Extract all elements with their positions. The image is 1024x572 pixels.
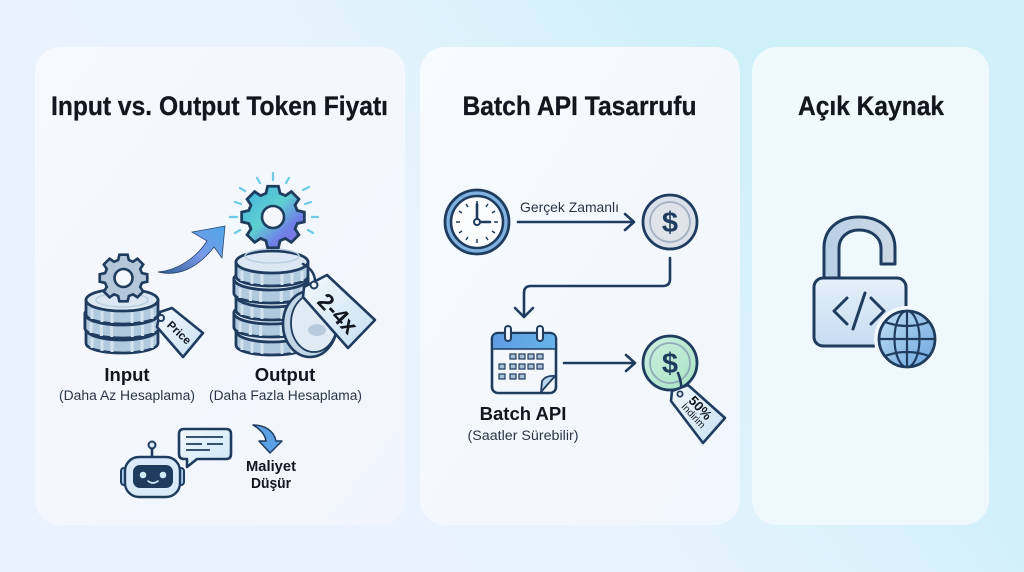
icon: 2-4x tag	[303, 264, 375, 348]
heading: open source: Açık Kaynak	[798, 91, 945, 121]
icon: output coin stack	[234, 249, 308, 355]
label: input: (Daha Az Hesaplama)	[59, 388, 195, 403]
label: input	[59, 364, 195, 403]
icon: speech bubble	[179, 429, 231, 467]
label: reduce cost: Maliyet	[246, 458, 296, 475]
panel: batch api savings	[420, 47, 740, 525]
icon: globe	[874, 306, 940, 372]
icon: 2-4x tag: 2-4x	[312, 288, 363, 339]
icon: price tag: Price	[164, 319, 193, 347]
label: output: (Daha Fazla Hesaplama)	[209, 388, 362, 403]
heading: input vs output: Input vs. Output Token Fiyatı	[51, 91, 388, 121]
icon: clock	[445, 190, 509, 254]
panel: input vs output token price	[35, 47, 405, 525]
icon: green dollar coin: $	[662, 348, 678, 380]
arrow: cost down	[253, 425, 282, 453]
arrow: input to output	[158, 226, 225, 273]
icon: robot	[121, 442, 184, 497]
label: real time: Gerçek Zamanlı	[520, 199, 619, 215]
arrow: down to batch	[515, 258, 670, 317]
arrow: real time	[518, 214, 634, 230]
label: output: Output	[255, 364, 315, 385]
label: batch api	[468, 403, 578, 443]
icon: green dollar coin	[643, 336, 697, 390]
icon: dollar coin: $	[662, 207, 678, 239]
panel: open source	[752, 47, 989, 525]
label: batch api: (Saatler Sürebilir)	[468, 428, 578, 443]
heading: batch api: Batch API Tasarrufu	[462, 91, 696, 121]
icon: discount tag: 50%	[686, 393, 715, 423]
label: input: Input	[104, 364, 150, 385]
icon: large coin	[283, 291, 337, 357]
icon: open padlock	[814, 217, 906, 346]
label: batch api: Batch API	[480, 403, 566, 424]
label: reduce cost: Düşür	[251, 475, 291, 492]
icon: glowing gear	[230, 173, 318, 248]
icon: price tag	[157, 308, 203, 357]
label: reduce cost	[246, 458, 296, 492]
icon: input coin stack with gear	[85, 255, 159, 353]
icon: calendar	[492, 326, 556, 393]
icon: dollar coin	[643, 195, 697, 249]
icon: discount tag	[671, 373, 725, 443]
arrow: batch	[564, 355, 635, 371]
icon: discount tag: İndirim	[679, 400, 709, 431]
label: output	[209, 364, 362, 403]
